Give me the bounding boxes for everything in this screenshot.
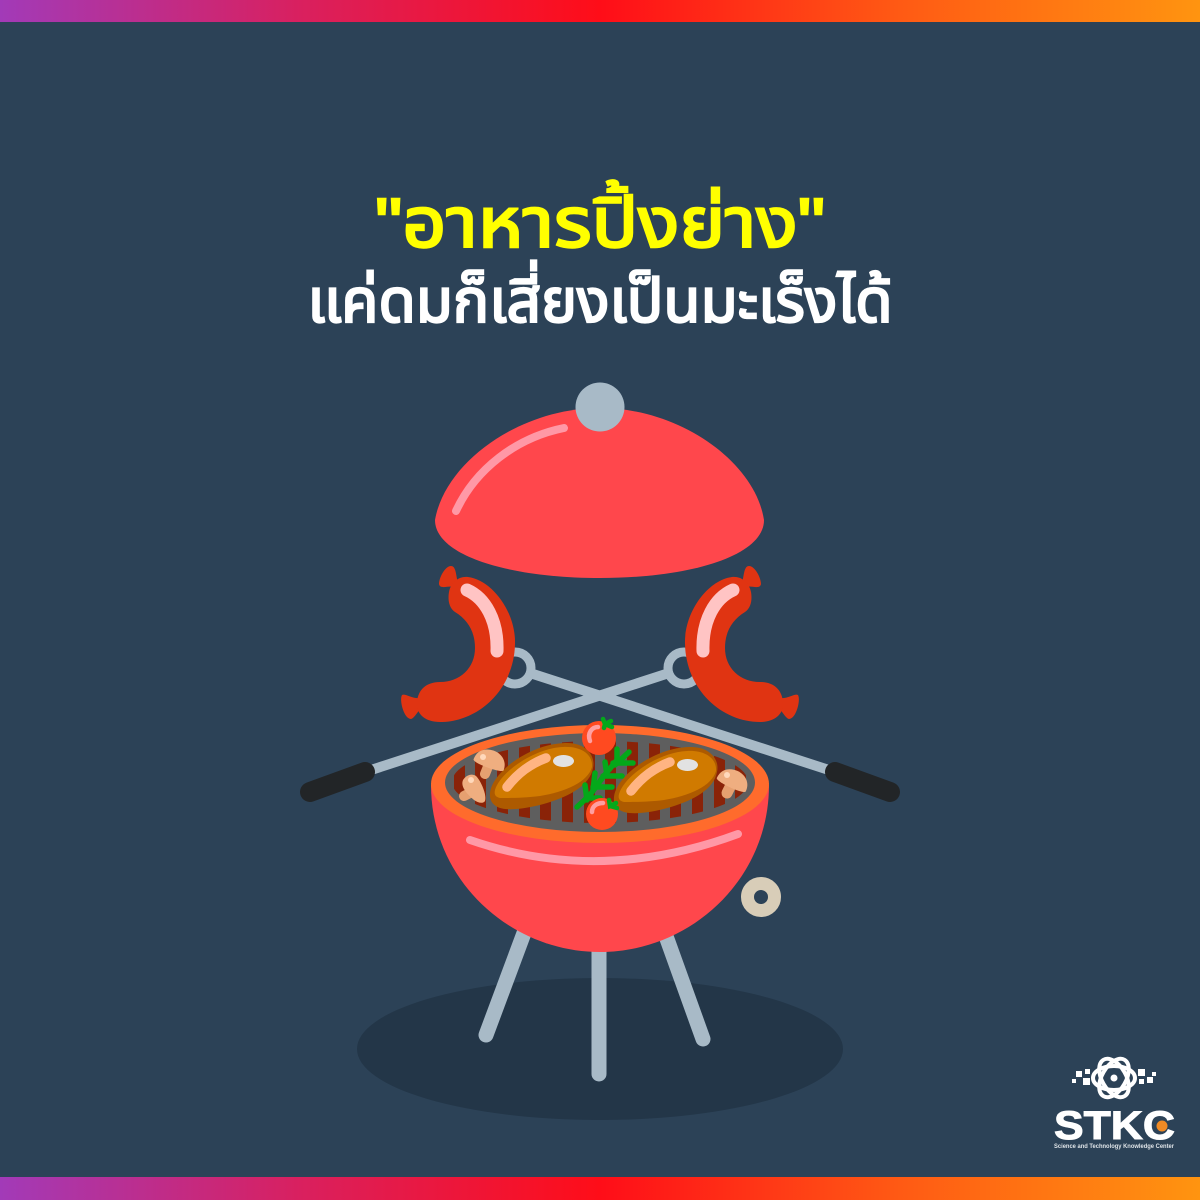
left sausage: [401, 566, 515, 722]
handle ring: [748, 884, 774, 910]
bowl rim: [431, 725, 769, 843]
grate base: [445, 733, 755, 832]
grate bars: [454, 741, 746, 823]
right-to-left tong: [310, 652, 700, 792]
STKC logo: [1054, 1054, 1175, 1150]
tongs: [310, 652, 890, 792]
mushroom bottom left: [462, 775, 485, 803]
title: [308, 180, 892, 335]
right sausage: [685, 566, 799, 722]
lid highlight: [456, 428, 564, 511]
tomato bottom: [586, 798, 618, 830]
tomato top: [582, 719, 616, 755]
logo wordmark: STKC: [1054, 1104, 1175, 1148]
grill legs: [486, 925, 703, 1074]
chicken right: [614, 747, 717, 813]
bottom gradient bar: [0, 1177, 1200, 1200]
ground shadow: [357, 978, 843, 1120]
left-to-right tong: [499, 652, 890, 792]
logo pixels: [1072, 1069, 1156, 1085]
logo caption: Science and Technology Knowledge Center: [1054, 1143, 1174, 1150]
chicken left: [490, 743, 593, 809]
grill lid: [435, 382, 764, 578]
bowl highlight: [470, 834, 738, 861]
mushroom top left: [473, 745, 509, 774]
title line 1: "อาหารปิ้งย่าง": [375, 180, 825, 262]
rosemary sprig: [577, 749, 633, 807]
grill bowl: [431, 725, 769, 952]
logo atom icon: [1093, 1054, 1135, 1102]
title line 2: แค่ดมก็เสี่ยงเป็นมะเร็งได้: [308, 260, 892, 335]
lid knob: [576, 382, 624, 432]
mushroom right: [716, 764, 752, 794]
top gradient bar: [0, 0, 1200, 22]
logo dot: [1156, 1120, 1168, 1132]
